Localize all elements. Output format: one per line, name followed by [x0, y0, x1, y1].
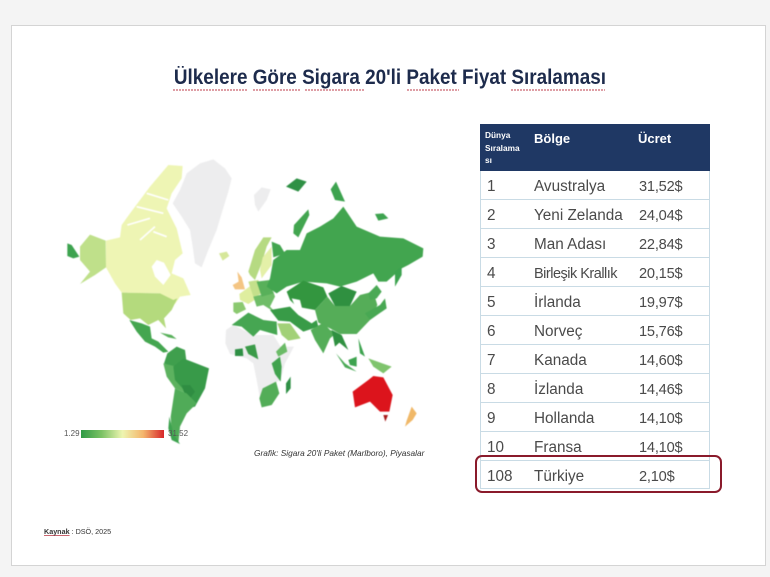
map: Australia	[353, 376, 393, 412]
text: Türkiye	[534, 468, 584, 485]
map: Southeast Asia	[332, 330, 348, 350]
map: Southern Africa	[259, 382, 279, 407]
text: Kanada	[534, 352, 587, 369]
header: rank: Sıralama	[485, 142, 520, 152]
text: 8	[487, 381, 496, 398]
map: UK and Ireland (orange)	[233, 272, 245, 289]
map: South America	[163, 347, 209, 444]
map: Mexico and Central America	[129, 320, 168, 353]
map: New Zealand	[405, 407, 417, 427]
text: 10	[487, 439, 504, 456]
text: 9	[487, 410, 496, 427]
map: Iceland	[219, 252, 229, 261]
text: 6	[487, 323, 496, 340]
map: Hawaii and Aleutian green area	[67, 243, 79, 258]
map: Canada and Arctic	[106, 165, 191, 304]
text: 24,04$	[639, 208, 682, 224]
map: West and Central Africa	[235, 348, 243, 356]
map: Turkey Middle East	[270, 307, 318, 332]
text: 31,52$	[639, 179, 682, 195]
map: Arctic channels	[127, 193, 168, 240]
map: Hudson Bay	[152, 260, 171, 285]
map: India	[311, 323, 337, 353]
map legend	[64, 429, 188, 438]
text: 19,97$	[639, 295, 682, 311]
text: Norveç	[534, 323, 582, 340]
header: rank	[485, 130, 520, 165]
map: China	[315, 292, 377, 334]
callout: Türkiye highlight	[475, 455, 722, 493]
text: 2,10$	[639, 469, 675, 485]
text: İzlanda	[534, 381, 583, 398]
map: Scandinavia	[248, 237, 272, 280]
map: North Africa	[232, 313, 277, 337]
title: Ülkelere Göre Sigara 20'li Paket Fiyat Sıralaması	[174, 66, 606, 89]
text: İrlanda	[534, 294, 581, 311]
text: 108	[487, 468, 513, 485]
text: Hollanda	[534, 410, 594, 427]
text: Man Adası	[534, 236, 606, 253]
table rows	[480, 171, 710, 489]
map: USA	[122, 293, 177, 328]
text: 22,84$	[639, 237, 682, 253]
text: 14,46$	[639, 382, 682, 398]
map: Ethiopia and East Africa	[276, 343, 287, 357]
header: price: Ücret	[638, 131, 671, 146]
text: 7	[487, 352, 496, 369]
map: Russia	[267, 207, 423, 293]
map source caption: Grafik: Sigara 20'li Paket (Marlboro), Piyasalar	[254, 448, 424, 458]
text: Yeni Zelanda	[534, 207, 623, 224]
source note: Kaynak : DSÖ, 2025	[44, 527, 111, 536]
text: Birleşik Krallık	[534, 266, 617, 282]
text: 14,10$	[639, 411, 682, 427]
header: region: Bölge	[534, 131, 570, 146]
map: Central Asia	[287, 281, 327, 310]
text: 3	[487, 236, 496, 253]
map: Western Europe	[233, 302, 246, 314]
header: rank: sı	[485, 155, 492, 165]
map: Alaska	[80, 235, 106, 284]
text: 14,60$	[639, 353, 682, 369]
text: 2	[487, 207, 496, 224]
text: Avustralya	[534, 178, 605, 195]
text: 14,10$	[639, 440, 682, 456]
text: 4	[487, 265, 496, 282]
table header	[480, 124, 710, 171]
text: 1	[487, 178, 496, 195]
legend colour scale	[81, 430, 164, 438]
map: Japan and Korea	[365, 298, 387, 320]
legend minimum: 1.29	[64, 429, 80, 438]
header: rank: Dünya	[485, 130, 510, 140]
text: 5	[487, 294, 496, 311]
map: Svalbard and Arctic islands	[286, 178, 307, 192]
text: 20,15$	[639, 266, 682, 282]
text: Fransa	[534, 439, 582, 456]
legend maximum: 31.52	[168, 429, 188, 438]
text: 15,76$	[639, 324, 682, 340]
map: Caspian Sea	[292, 298, 312, 323]
map: Greenland and unreported regions	[173, 159, 294, 398]
